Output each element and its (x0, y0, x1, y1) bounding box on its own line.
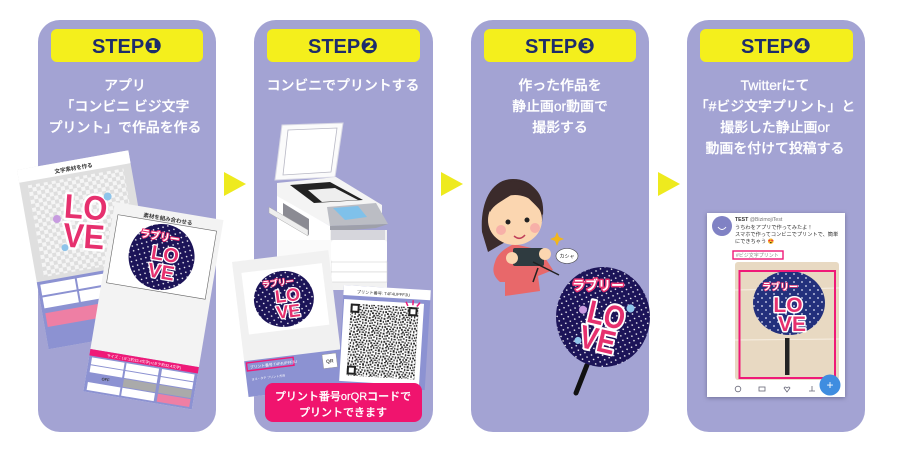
phone screen: combine materials: 素材を組み合わせる (143, 211, 193, 227)
panel: step 2 (254, 20, 433, 432)
tweet photo (735, 262, 839, 380)
step 3 heading (512, 77, 608, 135)
step 1 heading: プリント」で作品を作る (49, 119, 201, 135)
callout: print instruction: プリント番号orQRコードで (275, 390, 411, 403)
avatar (712, 216, 732, 236)
arrow: step 3 to 4 (658, 172, 680, 196)
tweet text: スマホで作ってコンビニでプリントで、簡単 (735, 230, 838, 238)
step 1 badge (51, 29, 203, 62)
fan caption: ラブリー (572, 278, 624, 293)
step 1 badge: STEP❶ (92, 34, 162, 58)
step 4 heading: 「#ビジ文字プリント」と (695, 98, 855, 114)
LOVE artwork: LO (584, 294, 629, 338)
step 3 badge (484, 29, 636, 62)
step 3 heading: 撮影する (532, 119, 588, 135)
LOVE artwork (569, 292, 636, 364)
tweet text: TEST @BizimojiTest (735, 217, 783, 223)
step 4 badge (700, 29, 853, 62)
LOVE artwork: LO (773, 294, 803, 317)
LOVE artwork (133, 227, 183, 286)
callout: print instruction: プリントできます (299, 406, 387, 419)
hashtag highlight (733, 251, 783, 259)
LOVE artwork (51, 186, 112, 257)
step 4 heading (695, 77, 855, 156)
LOVE artwork: VE (62, 216, 106, 257)
LOVE artwork: ラブリー (139, 227, 181, 246)
tweet action icons (735, 386, 815, 392)
panel: step 4 (687, 20, 865, 432)
tweet text: にできちゃう 😍 (735, 238, 775, 245)
QR code card: プリント番号: T4F4UPFF3U (357, 288, 410, 299)
step 3 heading: 作った作品を (518, 77, 602, 93)
compose button: + (826, 378, 834, 392)
LOVE artwork: ラブリー (261, 276, 294, 289)
arrow: step 1 to 2 (224, 172, 246, 196)
speech bubble: shutter sound: カシャ (559, 254, 575, 260)
phone screen: combine materials: OFF (101, 376, 110, 383)
uchiwa fan (556, 267, 650, 393)
step 4 heading: Twitterにて (741, 77, 809, 93)
print sheet with number: QR (326, 358, 334, 365)
step 2 heading: コンビニでプリントする (267, 77, 419, 93)
phone screen: combine materials: サイズ：(ヨコ約32.4文字)×(タテ約32.4文字) (107, 353, 182, 370)
LOVE artwork (261, 275, 303, 324)
step 2 badge: STEP❷ (308, 34, 378, 58)
QR code card (338, 285, 431, 390)
phone screen: create letter material (17, 150, 160, 349)
step 4 heading: 動画を付けて投稿する (706, 140, 844, 156)
phone screen: combine materials (83, 202, 223, 410)
illustration: woman photographing with a phone (482, 179, 559, 296)
print sheet with number (232, 250, 345, 397)
tweet text: うちわをアプリで作ってみたよ！ (735, 223, 813, 231)
arrow: step 2 to 3 (441, 172, 463, 196)
callout: print instruction (265, 383, 422, 422)
step 3 badge: STEP❸ (525, 34, 595, 58)
icon: camera flash sparkle (550, 232, 564, 246)
panel: step 3 (471, 20, 649, 432)
LOVE artwork: VE (275, 300, 302, 323)
tweet mockup (707, 213, 845, 397)
LOVE artwork: VE (778, 313, 806, 336)
LOVE artwork: LO (63, 187, 109, 228)
print sheet with number: ヨコ・タテ プリント方向 (251, 372, 285, 381)
step 3 heading: 静止画or動画で (512, 98, 608, 114)
step 1 heading: アプリ (104, 77, 146, 93)
hashtag highlight: #ビジ文字プリント (736, 252, 779, 259)
illustration: multifunction copier (269, 123, 388, 290)
step 1 heading (49, 77, 201, 135)
print sheet with number: プリント番号 T4F4UPFF3U (250, 359, 298, 370)
step 1 heading: 「コンビニ ビジ文字 (61, 98, 189, 114)
speech bubble: shutter sound (556, 248, 578, 264)
tweet text (735, 217, 838, 245)
LOVE artwork: VE (576, 319, 619, 362)
panel: step 1 (38, 20, 216, 432)
step 4 badge: STEP❹ (741, 34, 811, 58)
compose button (820, 374, 840, 396)
LOVE artwork: LO (274, 284, 301, 307)
phone screen: create letter material: 文字素材を作る (54, 161, 93, 175)
LOVE artwork: ラブリー (762, 281, 798, 292)
LOVE artwork: LO (149, 242, 180, 268)
step 2 badge (267, 29, 420, 62)
step 4 heading: 撮影した静止画or (720, 119, 830, 135)
LOVE artwork: VE (146, 260, 176, 286)
LOVE artwork (762, 281, 806, 336)
